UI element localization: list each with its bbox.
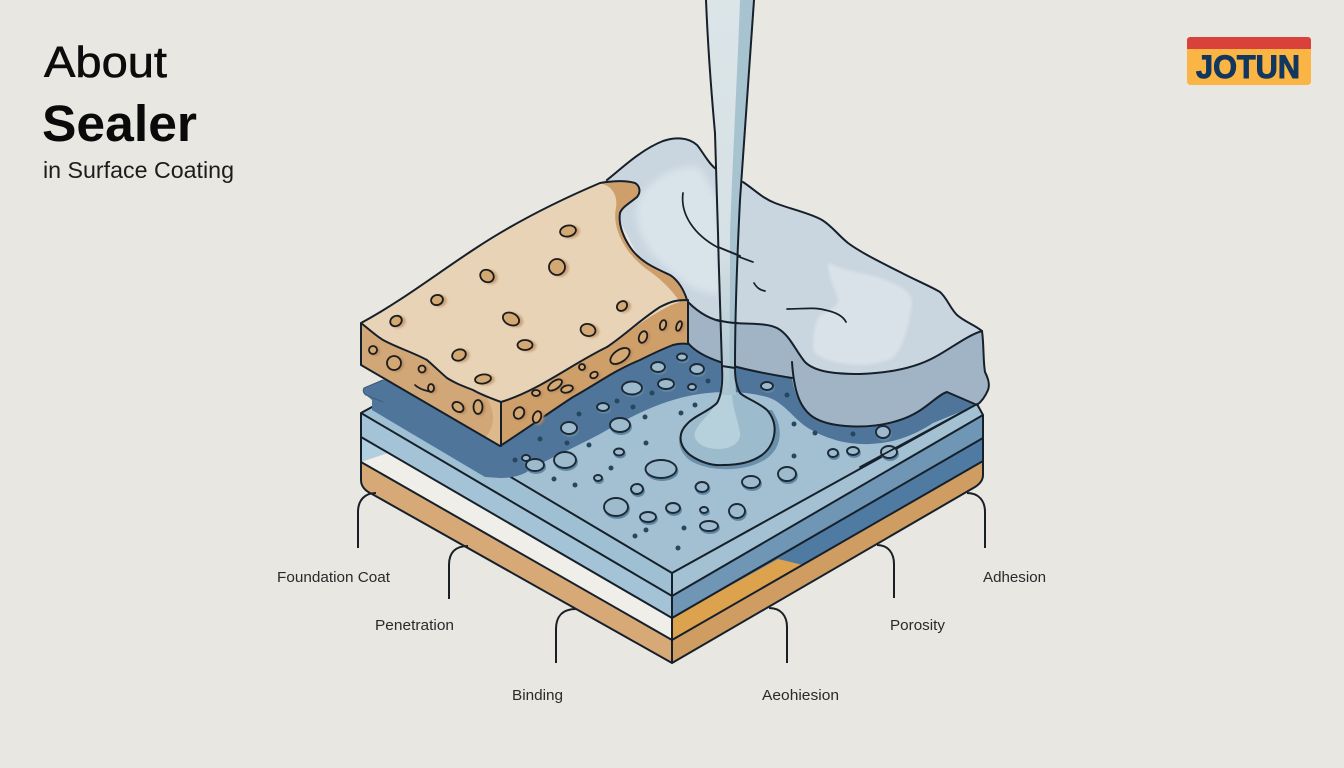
surface layer [377,240,977,573]
title line: Sealer: Sealer [42,95,197,152]
cloth outlines [607,138,989,426]
orange patch [672,559,803,640]
surface line over droplets [860,404,977,467]
stone left face [361,323,501,446]
stream shaded strip [729,0,754,395]
cloth highlight right [813,262,912,365]
callout: Aeohiesion: Aeohiesion [762,688,839,704]
callout: Penetration: Penetration [375,618,454,634]
cloth highlight left [636,167,722,295]
right side bands [672,404,983,596]
stone top face [361,183,680,402]
pool highlight [695,395,740,449]
callout: Binding: Binding [512,688,563,704]
callout: Penetration [375,546,468,634]
cloth side face [688,302,988,426]
stone right face [500,300,688,446]
pool shadow [679,410,780,469]
pool [681,393,775,465]
stone top rim [361,181,687,402]
stone top pits [388,224,629,385]
scattered dots [512,378,856,550]
layered base slab [361,240,983,663]
cloth fold lines [683,193,846,322]
left side bands [361,401,672,596]
cloth edge seen through stream [717,247,740,368]
dark sealer layer [363,340,977,478]
callout: Binding [512,609,576,704]
logo: Jotun: JOTUN [1196,49,1300,85]
porous stone block [361,181,688,446]
callout: Adhesion: Adhesion [983,570,1046,586]
stream outlines [681,0,775,465]
callout: Adhesion [967,493,1046,586]
stream body [706,0,754,395]
stone outlines [361,181,688,446]
callout: Porosity [877,545,946,634]
logo: Jotun [1187,37,1311,85]
callout: Foundation Coat [277,493,390,586]
stone side pits [369,319,683,424]
callout: Foundation Coat: Foundation Coat [277,570,390,586]
droplets [522,354,897,531]
sealer cloth sheet [600,138,989,426]
title block [42,38,234,183]
pouring stream and pool [679,0,780,469]
subtitle: in Surface Coating [43,157,234,183]
callout: Porosity: Porosity [890,618,946,634]
title line: About: About [44,38,167,87]
callout: Aeohiesion [762,608,839,704]
slab outlines [361,401,983,663]
cloth top face [600,138,982,374]
